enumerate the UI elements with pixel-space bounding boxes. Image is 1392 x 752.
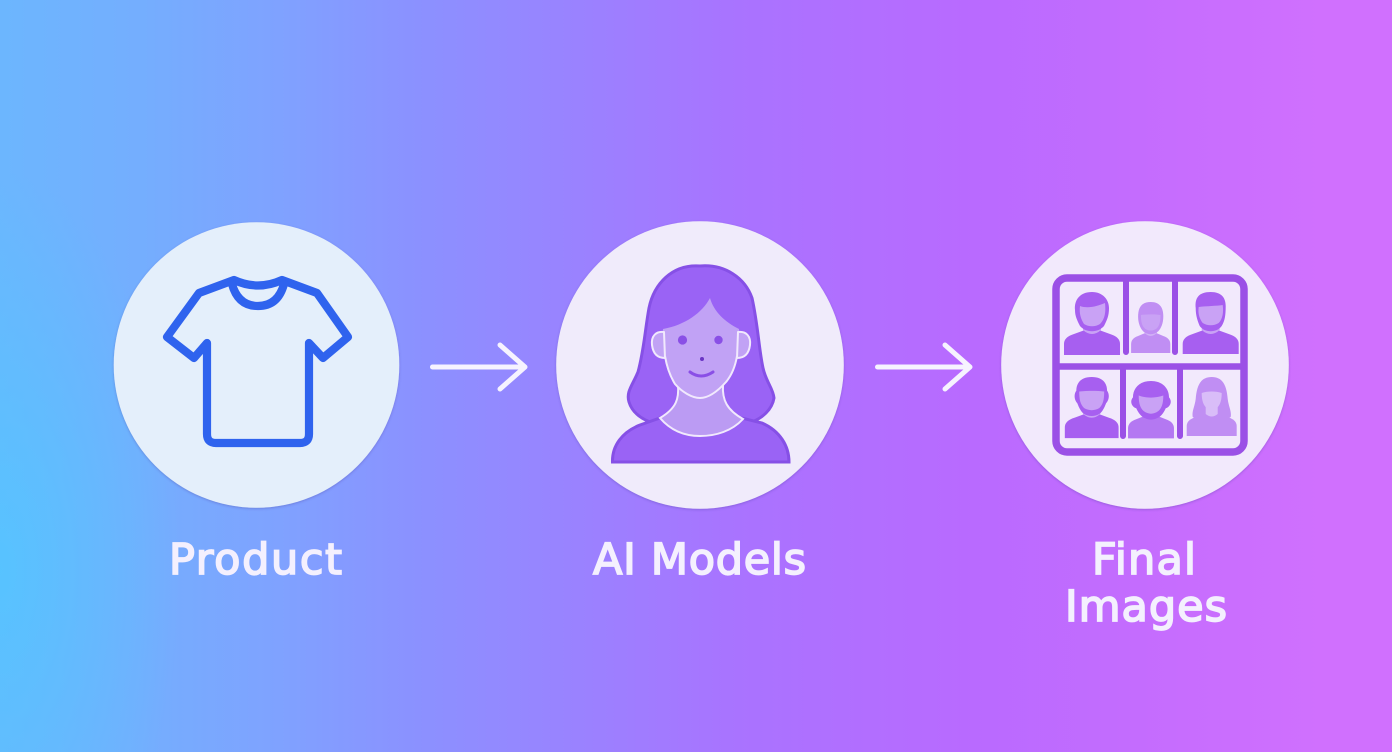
label: AI Models: AI Models [593, 535, 806, 585]
label: Final Images [1065, 535, 1227, 632]
label: Product: Product [169, 535, 342, 585]
neck [660, 385, 743, 436]
step 1: product [114, 222, 399, 585]
body [612, 418, 789, 462]
circle: final images [1001, 221, 1289, 509]
arrow: AI models to final images [878, 345, 970, 389]
arrow: product to AI models [432, 345, 525, 389]
nose [700, 357, 704, 361]
smile [690, 372, 713, 376]
portrait 2 [1131, 302, 1170, 353]
label: Final Images: Images [1065, 582, 1227, 632]
portrait 4 [1065, 377, 1119, 438]
step 2: AI models [556, 221, 844, 585]
label: Final Images: Final [1092, 535, 1196, 585]
circle: AI models [556, 221, 844, 509]
circle: product [114, 222, 399, 508]
icon: image grid [1056, 278, 1244, 452]
portrait 6 [1187, 377, 1237, 436]
icon: woman portrait [612, 266, 789, 462]
eyes [678, 335, 723, 345]
face [663, 298, 739, 398]
grid frame [1056, 278, 1244, 452]
portrait 3 [1183, 292, 1239, 354]
portrait 1 [1064, 292, 1120, 355]
ears and jaw outline [652, 332, 750, 398]
step 3: final images [1001, 221, 1289, 632]
hair [628, 266, 774, 422]
icon: t-shirt [167, 280, 348, 443]
portrait 5 [1128, 381, 1174, 438]
